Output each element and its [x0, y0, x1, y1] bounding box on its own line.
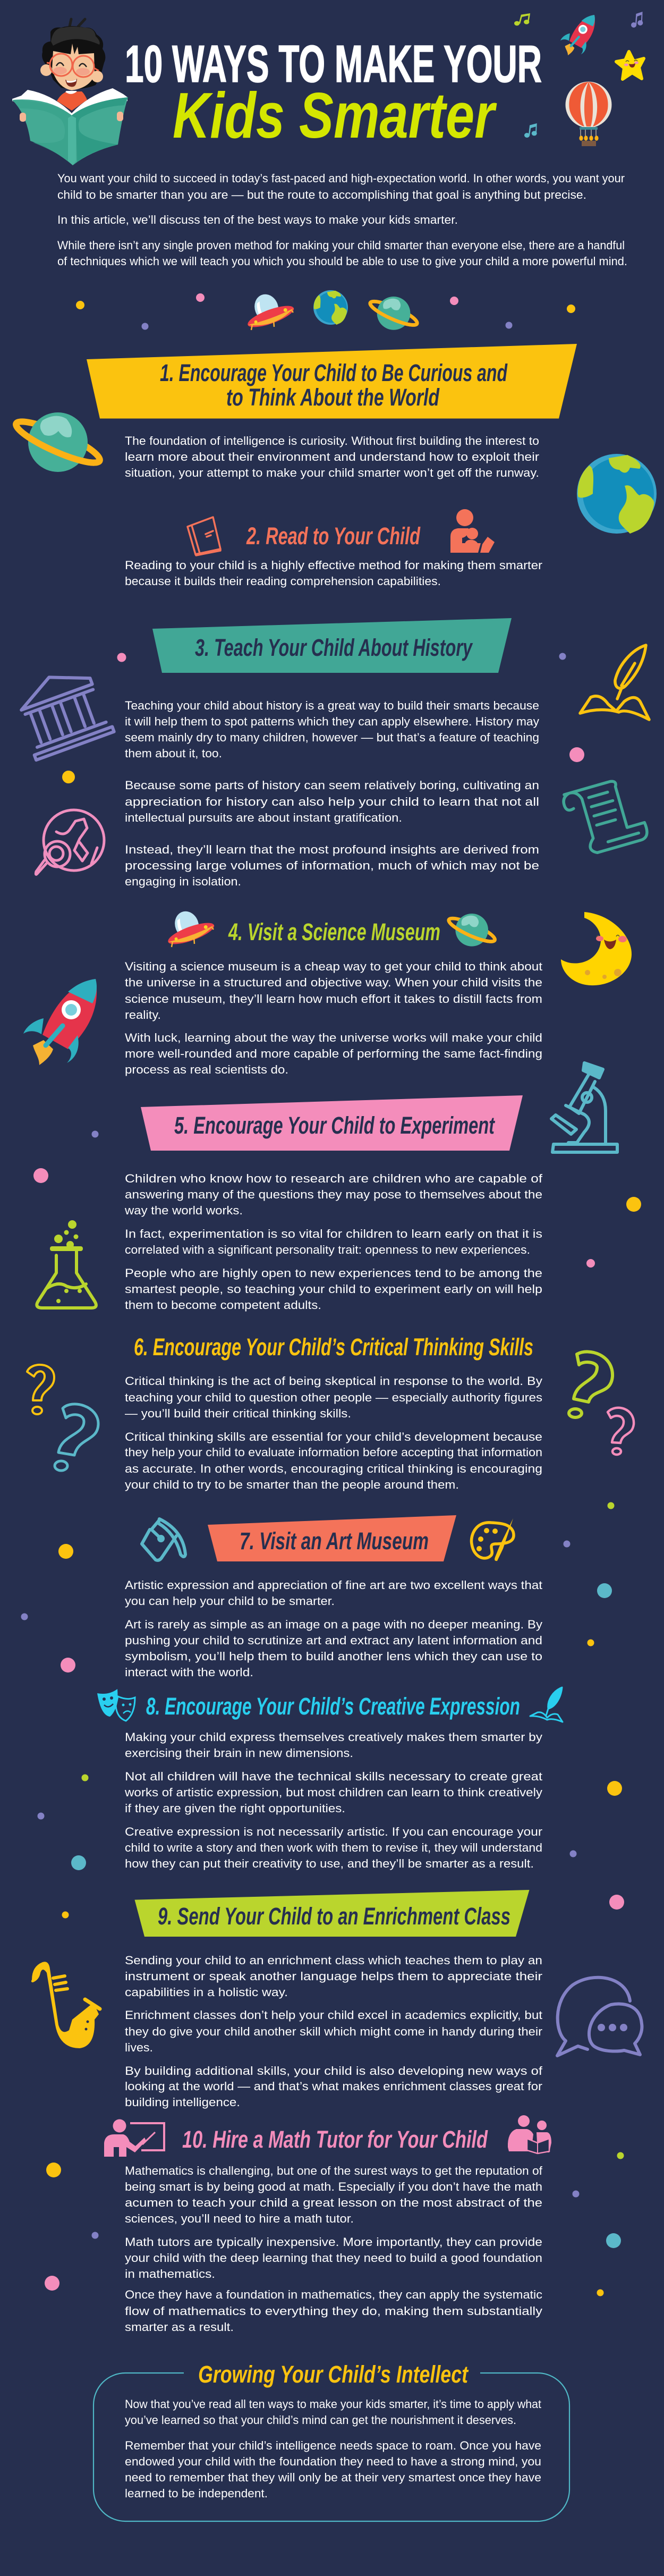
- text block 4: Visiting a science museum is a cheap way to get your child to think about: [125, 960, 542, 973]
- text block 4: [125, 960, 542, 1076]
- intro text: While there isn’t any single proven method for making your child smarter than everyone else, there are a handful: [57, 239, 625, 252]
- icon: teacher at board: [104, 2119, 164, 2157]
- heading 4: 4. Visit a Science Museum: [228, 918, 440, 945]
- panel: section 5 experiment: [124, 1095, 543, 1312]
- text block 10: sciences, you’ll need to hire a math tutor.: [125, 2212, 354, 2225]
- heading: growing your child's intellect: Growing Your Child’s Intellect: [198, 2361, 469, 2388]
- text block 3: intellectual pursuits are about instant gratification.: [125, 811, 402, 824]
- text block 9: instrument or speak another language helps them to appreciate their: [125, 1970, 542, 1983]
- text block 3: processing large volumes of information, much of which may not be: [125, 859, 539, 872]
- panel: section 10 math tutor: [104, 2115, 551, 2334]
- text block 8: [124, 1730, 542, 1870]
- text block 5: them to become competent adults.: [125, 1298, 321, 1312]
- text block 7: you can help your child to be smarter.: [125, 1594, 335, 1608]
- text block 4: reality.: [125, 1008, 161, 1021]
- heading 2: 2. Read to Your Child: [246, 522, 421, 550]
- heading 7: 7. Visit an Art Museum: [240, 1527, 429, 1555]
- text block 8: how they can put their creativity to use, and they’ll be smarter as a result.: [125, 1857, 534, 1870]
- icon: chat bubbles: [557, 1978, 642, 2056]
- icon: globe with magnifier: [36, 810, 104, 874]
- text block 3: Teaching your child about history is a great way to build their smarts because: [125, 699, 539, 712]
- text block 8: Not all children will have the technical skills necessary to create great: [125, 1770, 542, 1783]
- text block 5: answering many of the questions they may pose to themselves about the: [125, 1188, 542, 1201]
- text block 10: Mathematics is challenging, but one of the surest ways to get the reputation of: [125, 2164, 543, 2177]
- icon: ringed planet: [368, 297, 420, 330]
- text block 8: exercising their brain in new dimensions.: [125, 1746, 353, 1760]
- text block 5: [124, 1172, 543, 1312]
- panel: section 6 critical thinking: [125, 1333, 542, 1491]
- text block 9: they do give your child another skill which might come in handy during their: [125, 2025, 542, 2038]
- icon: large ringed planet: [12, 412, 104, 472]
- icon: large earth: [577, 454, 657, 534]
- icon: flying saucer: [160, 903, 216, 948]
- text block 10: flow of mathematics to everything they do, making them substantially: [125, 2304, 542, 2318]
- text block 9: Sending your child to an enrichment class which teaches them to play an: [125, 1954, 542, 1967]
- text block 7: pushing your child to scrutinize art and extract any latent information and: [125, 1634, 542, 1647]
- icon: flask: [37, 1220, 96, 1308]
- panel: section 4 science museum: [125, 903, 542, 1076]
- heading 9: 9. Send Your Child to an Enrichment Class: [158, 1903, 510, 1930]
- text block 9: capabilities in a holistic way.: [125, 1986, 288, 1999]
- text block 8: works of artistic expression, but most children can learn to think creatively: [124, 1786, 542, 1799]
- panel: conclusion: [93, 2361, 569, 2521]
- icon: smiling star: [616, 52, 644, 79]
- panel: section 2 reading: [125, 509, 542, 588]
- intro text: [57, 172, 627, 268]
- text block 7: symbolism, you’ll help them to build another lens which they can use to: [125, 1650, 542, 1663]
- text block 9: looking at the world — and that’s what makes enrichment classes great for: [125, 2080, 542, 2093]
- icon: green music note: [514, 13, 530, 26]
- icon: green question mark: [569, 1352, 612, 1417]
- text block 4: science museum, they’ll learn how much effort it takes to distill facts from: [125, 992, 542, 1006]
- icon: ringed planet: [447, 914, 497, 947]
- icon: purple music note: [631, 12, 643, 28]
- heading 5: 5. Encourage Your Child to Experiment: [174, 1112, 495, 1139]
- text block 2: Reading to your child is a highly effective method for making them smarter: [125, 559, 542, 572]
- icon: yellow question mark: [27, 1365, 54, 1414]
- text block 3: Because some parts of history can seem relatively boring, cultivating an: [125, 779, 539, 792]
- text block 4: more well-rounded and more capable of performing the same fact-finding: [125, 1047, 542, 1060]
- text block 10: Math tutors are typically inexpensive. More importantly, they can provide: [125, 2235, 542, 2249]
- text block 10: your child with the deep learning that they need to build a good foundation: [125, 2251, 542, 2265]
- text block 8: Creative expression is not necessarily artistic. If you can encourage your: [125, 1825, 542, 1838]
- text block 9: Enrichment classes don’t help your child excel in academics explicitly, but: [125, 2008, 542, 2022]
- text block 7: Artistic expression and appreciation of fine art are two excellent ways that: [125, 1578, 542, 1592]
- icon: parent reading with child: [450, 509, 495, 553]
- icon: smiling moon: [561, 912, 632, 985]
- text block: conclusion: Remember that your child’s intelligence needs space to roam. Once you have: [125, 2439, 541, 2452]
- text block 1: The foundation of intelligence is curiosity. Without first building the interest to: [125, 434, 539, 447]
- text block 6: as accurate. In other words, encouraging critical thinking is encouraging: [125, 1462, 542, 1475]
- banner: teal heading: [152, 618, 512, 673]
- heading 8: 8. Encourage Your Child’s Creative Expression: [146, 1693, 520, 1720]
- heading 1: [160, 359, 508, 411]
- text block: conclusion: [125, 2397, 541, 2500]
- text block 9: [125, 1954, 543, 2109]
- heading 1: to Think About the World: [226, 384, 440, 411]
- decorative dots: [21, 293, 641, 2296]
- text block 3: engaging in isolation.: [125, 875, 241, 888]
- text block 3: them about it, too.: [125, 747, 222, 760]
- text block 9: lives.: [125, 2041, 153, 2054]
- text block: conclusion: need to remember that they will only be at their very smartest once they have: [125, 2471, 541, 2484]
- text block 8: child to write a story and then work with them to revise it, they will understand: [125, 1841, 542, 1854]
- icon: scroll: [561, 775, 649, 858]
- text block 4: With luck, learning about the way the universe works will make your child: [125, 1031, 542, 1044]
- icon: hot air balloon: [565, 82, 612, 146]
- icon: feather over open book: [580, 645, 649, 720]
- text block 3: it will help them to spot patterns which they can apply elsewhere. History may: [125, 715, 539, 728]
- text block 5: way the world works.: [124, 1204, 243, 1217]
- text block 3: appreciation for history can also help your child to learn that not all: [125, 795, 539, 808]
- text block 10: Once they have a foundation in mathematics, they can apply the systematic: [125, 2288, 542, 2301]
- heading 3: 3. Teach Your Child About History: [195, 634, 473, 661]
- text block 10: [125, 2164, 543, 2334]
- text block 1: [125, 434, 539, 479]
- icon: rocket: [23, 979, 97, 1065]
- text block 6: your child to try to be smarter than the people around them.: [125, 1478, 459, 1491]
- text block: conclusion: you’ve learned so that your child’s mind can get the nourishment it deserves.: [125, 2413, 516, 2427]
- icon: rocket: [560, 15, 595, 55]
- text block 6: Critical thinking is the act of being skeptical in response to the world. By: [125, 1374, 542, 1388]
- text block 8: if they are given the right opportunities.: [125, 1802, 345, 1815]
- text block 8: Making your child express themselves creatively makes them smarter by: [125, 1730, 542, 1744]
- text block 5: smartest people, so teaching your child to experiment early on will help: [125, 1282, 542, 1296]
- text block 7: Art is rarely as simple as an image on a page with no deeper meaning. By: [125, 1618, 542, 1631]
- text block 10: acumen to teach your child a great lesson on the most abstract of the: [125, 2196, 542, 2209]
- icon: pink question mark: [608, 1408, 634, 1455]
- text block 9: building intelligence.: [125, 2096, 240, 2109]
- text block 9: By building additional skills, your child is also developing new ways of: [125, 2064, 543, 2077]
- text block 3: Instead, they’ll learn that the most profound insights are derived from: [125, 843, 539, 856]
- intro text: In this article, we’ll discuss ten of the best ways to make your kids smarter.: [57, 213, 458, 226]
- icon: kid reading a book: [12, 19, 128, 165]
- icon: cyan music note: [524, 123, 537, 138]
- text block 7: [125, 1578, 542, 1679]
- text block 2: because it builds their reading comprehension capabilities.: [125, 575, 441, 588]
- text block 1: learn more about their environment and understand how to exploit their: [125, 450, 539, 463]
- text block: conclusion: Now that you’ve read all ten ways to make your kids smarter, it’s time to apply what: [125, 2397, 541, 2411]
- panel: section 1 curiosity: [87, 344, 577, 479]
- panel: section 7 art museum: [125, 1515, 542, 1679]
- text block 6: Critical thinking skills are essential for your child’s development because: [125, 1430, 542, 1443]
- text block 5: People who are highly open to new experiences tend to be among the: [125, 1266, 542, 1280]
- text block 6: — you’ll build their critical thinking skills.: [125, 1407, 351, 1420]
- icon: microscope: [551, 1063, 617, 1152]
- text block 10: smarter as a result.: [125, 2320, 234, 2334]
- text block 1: situation, your attempt to make your child smarter won’t get off the runway.: [125, 466, 539, 479]
- intro text: You want your child to succeed in today’s fast-paced and high-expectation world. In other words, you want your: [57, 172, 625, 185]
- heading 1: 1. Encourage Your Child to Be Curious and: [160, 359, 508, 386]
- icon: palette: [471, 1518, 514, 1561]
- icon: theatre masks: [97, 1689, 135, 1721]
- intro text: of techniques which we will teach you which you should be able to use to give your child a more powerful mind.: [57, 255, 627, 268]
- intro text: child to be smarter than you are — but the route to accomplishing that goal is anything but precise.: [57, 188, 586, 201]
- icon: cyan question mark: [55, 1404, 98, 1471]
- text block 7: interact with the world.: [125, 1666, 253, 1679]
- icon: quill and book: [530, 1687, 563, 1722]
- outlined box: [93, 2373, 569, 2521]
- text block: conclusion: learned to be independent.: [125, 2487, 268, 2500]
- text block 10: being smart is by being good at math. Especially if you don’t have the math: [125, 2180, 542, 2193]
- panel: section 8 creative expression: [97, 1687, 563, 1870]
- banner: yellow heading: [87, 344, 577, 419]
- text block 3: seem mainly dry to many children, however — but that’s a feature of teaching: [125, 731, 539, 744]
- banner: pink heading: [141, 1095, 523, 1151]
- text block 5: correlated with a significant personality trait: openness to new experiences.: [125, 1243, 530, 1256]
- panel: section 9 enrichment class: [125, 1890, 543, 2109]
- banner: coral heading: [208, 1515, 456, 1561]
- text block: conclusion: endowed your child with the foundation they need to have a strong mind, you: [125, 2455, 541, 2468]
- icon: flying saucer: [240, 286, 296, 331]
- text block 5: Children who know how to research are children who are capable of: [125, 1172, 543, 1185]
- subtitle: Kids Smarter: [173, 79, 497, 151]
- text block 4: process as real scientists do.: [125, 1063, 288, 1076]
- text block 5: In fact, experimentation is so vital for children to learn early on that it is: [125, 1227, 542, 1240]
- text block 4: the universe in a structured and objective way. When your child visits the: [125, 976, 542, 989]
- text block 6: they help your child to evaluate information before accepting that information: [125, 1446, 542, 1459]
- banner: green heading: [135, 1890, 529, 1937]
- text block 3: [125, 699, 539, 888]
- icon: earth small: [313, 290, 348, 325]
- icon: temple: [11, 663, 114, 760]
- icon: saxophone: [31, 1962, 100, 2048]
- text block 10: in mathematics.: [125, 2267, 215, 2281]
- heading 10: 10. Hire a Math Tutor for Your Child: [182, 2126, 488, 2153]
- panel: section 3 history: [125, 618, 539, 888]
- icon: parent and child with book: [508, 2115, 551, 2153]
- text block 2: [125, 559, 542, 588]
- icon: book outline: [188, 517, 220, 555]
- text block 6: [125, 1374, 542, 1491]
- text block 6: teaching your child to question other people — especially authority figures: [125, 1391, 542, 1404]
- icon: paint bucket: [142, 1519, 185, 1560]
